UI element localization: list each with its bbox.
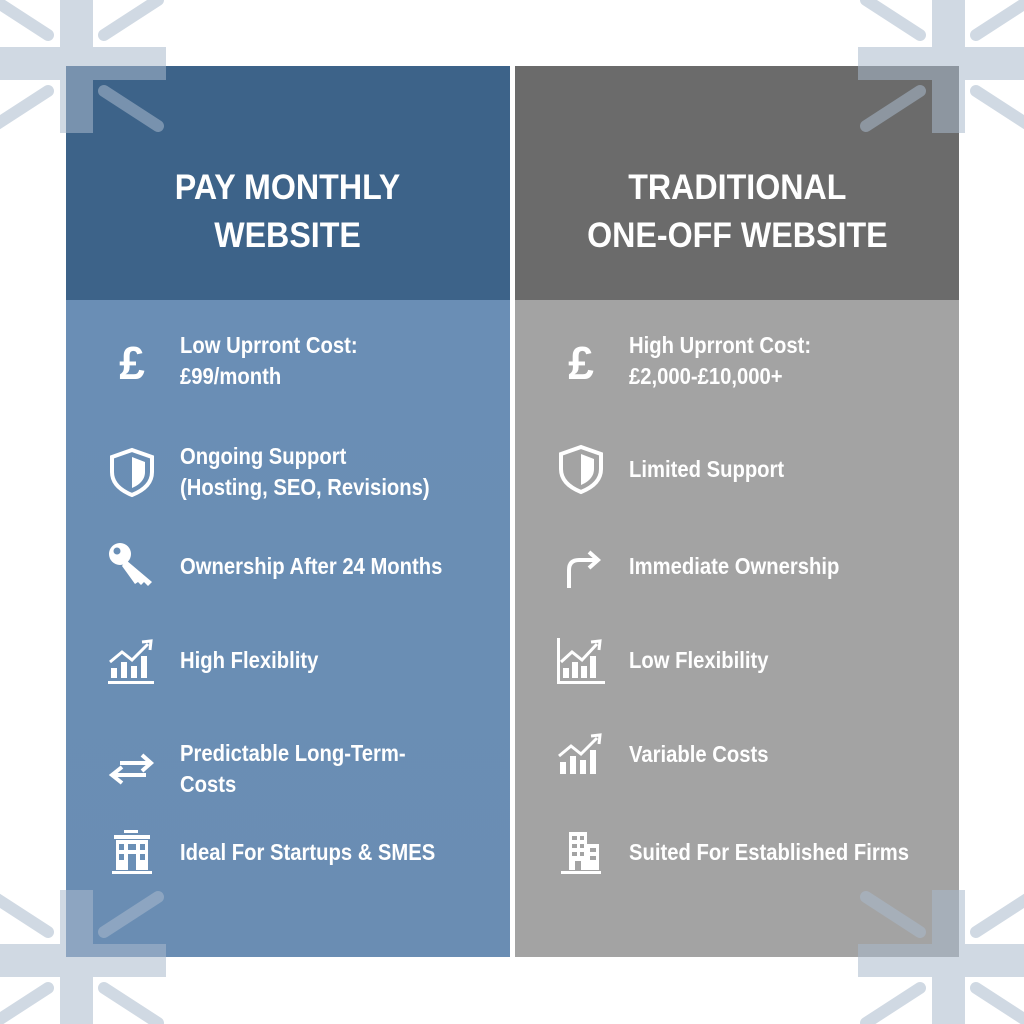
item: suited for established	[561, 832, 909, 874]
item: high upfront cost: High Uprront Cost:	[629, 332, 811, 358]
item: low upfront cost: £99/month	[180, 363, 281, 389]
panel: pay monthly	[66, 66, 510, 957]
panel: traditional	[515, 66, 959, 957]
heading: traditional: ONE-OFF WEBSITE	[587, 216, 887, 255]
item: limited support	[559, 445, 784, 494]
item: high flexibility: High Flexiblity	[180, 646, 318, 672]
heading: pay monthly	[66, 66, 510, 300]
item: immediate ownership	[567, 550, 839, 588]
item: ownership	[109, 543, 442, 586]
item: low flexibility	[557, 638, 768, 684]
item: limited support: Limited Support	[629, 456, 784, 482]
item: immediate ownership: Immediate Ownership	[629, 552, 839, 578]
item: ongoing support	[110, 443, 430, 500]
item: low upfront cost: Low Uprront Cost:	[180, 332, 358, 358]
item: ideal for startups	[112, 830, 435, 874]
heading: traditional	[515, 66, 959, 300]
heading: traditional: TRADITIONAL	[628, 168, 846, 207]
item: ongoing support: Ongoing Support	[180, 443, 346, 469]
item: suited for established: Suited For Established Firms	[629, 838, 909, 864]
item: high flexibility	[108, 639, 318, 684]
item: variable costs	[558, 733, 769, 774]
item: predictable costs: Predictable Long-Term-	[180, 740, 406, 766]
item: ideal for startups: Ideal For Startups & SMES	[180, 838, 435, 864]
item: high upfront cost: £2,000-£10,000+	[629, 363, 783, 389]
item: ownership: Ownership After 24 Months	[180, 552, 442, 578]
item: low flexibility: Low Flexibility	[629, 646, 768, 672]
item: predictable costs	[109, 740, 406, 797]
heading: pay monthly: PAY MONTHLY	[175, 168, 401, 207]
item: variable costs: Variable Costs	[629, 740, 769, 766]
item: predictable costs: Costs	[180, 771, 236, 797]
heading: pay monthly: WEBSITE	[215, 216, 361, 255]
item: low upfront cost	[119, 332, 358, 389]
item: high upfront cost	[568, 332, 811, 389]
item: ongoing support: (Hosting, SEO, Revisions)	[180, 474, 430, 500]
